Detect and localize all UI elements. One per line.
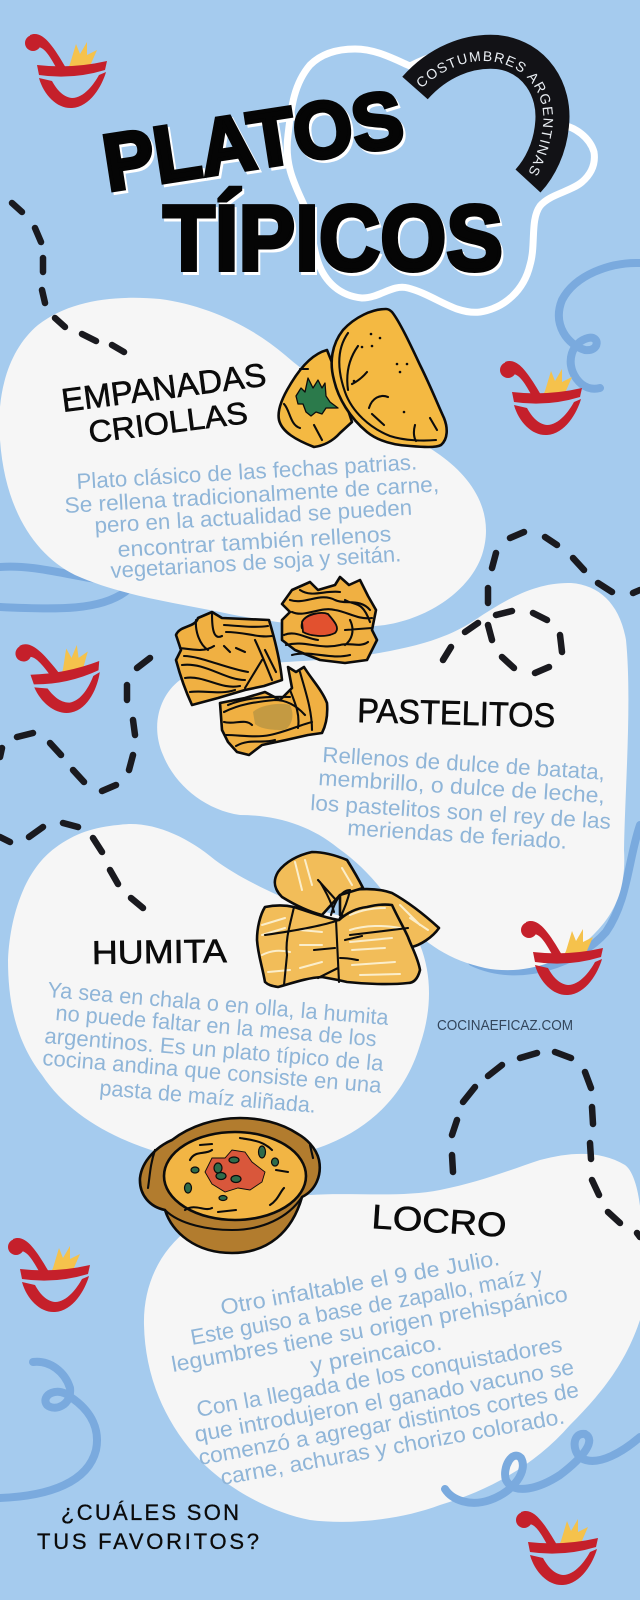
dashed path: right lower	[452, 1052, 640, 1237]
closing question: TUS FAVORITOS?	[37, 1529, 259, 1554]
text: locro: Este guiso a base de zapallo, maíz y	[188, 1262, 544, 1350]
text: humita	[42, 977, 390, 1118]
parsley	[296, 378, 338, 416]
caramel filling	[253, 704, 292, 730]
red filling	[302, 613, 337, 636]
panel: empanadas	[0, 298, 486, 627]
icon: mortar logo bottom right	[516, 1511, 598, 1585]
text: locro: Con la llegada de los conquistadores	[194, 1332, 564, 1422]
icon: mortar logo bottom left	[8, 1238, 90, 1312]
illustration: locro bowl	[140, 1118, 320, 1253]
heading: pastelitos: PASTELITOS	[357, 692, 556, 735]
bowl body	[140, 1118, 320, 1253]
icon: mortar logo right lower	[521, 921, 603, 995]
text: empanadas: encontrar también rellenos	[117, 521, 392, 562]
swirl: left middle	[0, 567, 128, 608]
husk right wing	[340, 889, 439, 947]
text: empanadas: Se rellena tradicionalmente de carne,	[64, 471, 440, 518]
panel: pastelitos	[157, 583, 628, 970]
closing question: ¿CUÁLES SON	[61, 1500, 239, 1525]
swirl: right edge under pastelitos panel	[472, 825, 640, 971]
icon: mortar logo top left	[25, 34, 107, 108]
red garnish	[205, 1150, 265, 1192]
title	[97, 73, 505, 293]
heading: empanadas criollas	[59, 356, 268, 450]
text: empanadas: pero en la actualidad se pueden	[94, 495, 413, 538]
text: locro: comenzó a agregar distintos cortes de	[196, 1377, 581, 1470]
empanada back	[279, 350, 352, 447]
illustration: empanadas	[279, 309, 447, 447]
title line: tipicos: TÍPICOS	[165, 189, 505, 293]
dashed path: right of empanadas	[443, 532, 640, 673]
closing question	[37, 1500, 259, 1554]
text: pastelitos: membrillo, o dulce de leche,	[318, 765, 606, 808]
text: humita: pasta de maíz aliñada.	[99, 1075, 317, 1118]
text: locro	[169, 1245, 581, 1490]
text: humita: no puede faltar en la mesa de los	[55, 1000, 378, 1051]
icon: mortar logo left	[14, 634, 106, 719]
text: empanadas: vegetarianos de soja y seitán.	[110, 541, 402, 583]
swirl: top right	[559, 263, 640, 389]
title line: tipicos: TÍPICOS	[163, 186, 503, 290]
text: humita: Ya sea en chala o en olla, la humita	[47, 977, 390, 1030]
title outline	[287, 49, 594, 312]
husk top	[275, 852, 363, 915]
icon: mortar logo right	[500, 361, 582, 435]
text: empanadas: Plato clásico de las fechas patrias.	[76, 449, 418, 494]
pastelito top	[282, 577, 377, 663]
text: pastelitos: los pastelitos son el rey de las	[310, 790, 612, 834]
dashed path: left middle	[0, 658, 150, 908]
website credit: COCINAEFICAZ.COM	[437, 1018, 573, 1034]
text: pastelitos: Rellenos de dulce de batata,	[322, 742, 606, 785]
text: locro: Otro infaltable el 9 de Julio.	[218, 1245, 501, 1320]
husk body	[257, 905, 420, 987]
illustration: pastelitos	[176, 577, 377, 755]
illustration: humita	[257, 852, 439, 987]
pastelito bottom	[220, 667, 327, 755]
panel: humita	[8, 824, 429, 1161]
text: locro: legumbres tiene su origen prehispánico	[169, 1281, 570, 1377]
soup	[164, 1132, 306, 1220]
pastelito left	[176, 612, 282, 705]
heading: locro: LOCRO	[370, 1198, 508, 1245]
heading: empanadas criollas: EMPANADAS	[59, 356, 268, 419]
text: empanadas	[64, 449, 440, 583]
heading: empanadas criollas: CRIOLLAS	[86, 395, 250, 450]
title line: platos: PLATOS	[97, 74, 409, 208]
text: pastelitos: meriendas de feriado.	[347, 815, 568, 854]
text: locro: y preincaico.	[308, 1330, 444, 1378]
text: locro: que introdujeron el ganado vacuno se	[192, 1354, 576, 1447]
banner text: COSTUMBRES ARGENTINAS	[417, 51, 554, 176]
text: humita: argentinos. Es un plato típico de la	[44, 1023, 385, 1076]
text: humita: cocina andina que consiste en una	[42, 1045, 383, 1098]
text: pastelitos	[310, 742, 612, 854]
text: locro: carne, achuras y chorizo colorado.	[218, 1404, 566, 1490]
panel: locro	[144, 1154, 640, 1522]
empanada front	[332, 309, 447, 447]
swirl: bottom right over panel	[445, 1434, 640, 1503]
swirl: bottom left	[0, 1362, 97, 1498]
heading: humita: HUMITA	[92, 932, 227, 971]
dashed path: top left	[12, 203, 124, 352]
curved banner	[402, 34, 570, 192]
title line: platos: PLATOS	[99, 76, 411, 210]
